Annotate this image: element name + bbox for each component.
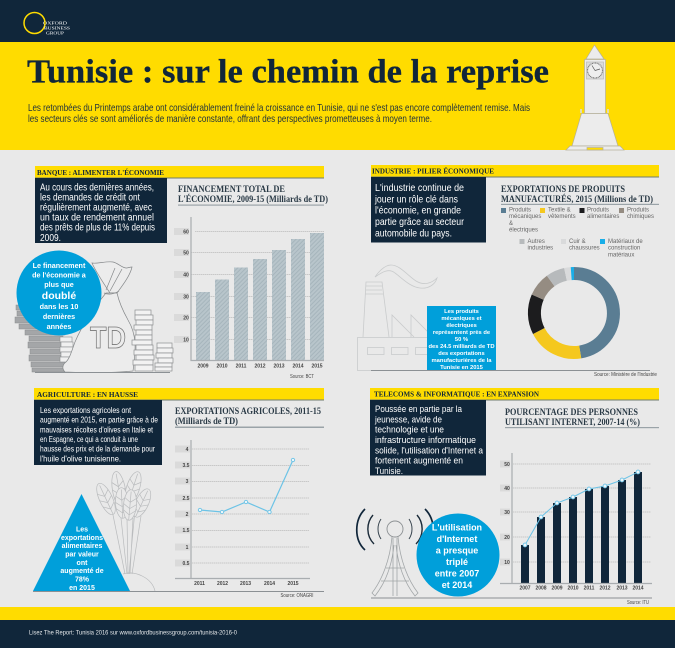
callout: triplé: et 2014 [442, 580, 472, 590]
text block: telecoms: solide, l'utilisation d'Internet a [375, 445, 484, 456]
callout: produits mécaniques: électriques [446, 323, 477, 329]
text block: banque [35, 178, 167, 244]
text block: agriculture: mauvaises récoltes d'olives en Italie et [40, 424, 153, 434]
callout: triplé: L'utilisation [432, 522, 482, 532]
section heading: agriculture: AGRICULTURE : EN HAUSSE [37, 390, 138, 399]
chart title: financement: L'ÉCONOMIE, 2009-15 (Milliards de TD) [178, 194, 328, 204]
text block: banque: des prêts de plus de 11% depuis [40, 222, 155, 234]
callout: doublé: plus que [44, 280, 74, 289]
callout: triplé: a presque [436, 546, 478, 556]
callout: doublé: Le financement [33, 261, 86, 270]
legend: donut: chimiques [627, 214, 654, 220]
line chart: exportations agricoles: 2012 [217, 581, 228, 587]
legend: donut: Cuir & [569, 239, 586, 245]
callout: doublé: dernières [43, 312, 75, 321]
callout: produits mécaniques: des exportations [438, 351, 485, 357]
combo chart: internet: 2010 [567, 586, 579, 592]
line chart: exportations agricoles: 1.5 [183, 528, 190, 534]
legend: donut [501, 208, 654, 258]
combo chart: internet: 40 [504, 486, 510, 492]
line chart: exportations agricoles: 2013 [240, 581, 251, 587]
source: onagri: Source: ONAGRI [280, 593, 314, 599]
combo chart: internet: 30 [504, 510, 510, 516]
line chart: exportations agricoles: 3.5 [183, 463, 190, 469]
callout: triangle 78%: augmenté de [60, 568, 104, 575]
section heading: industrie [371, 165, 659, 178]
callout: triangle 78% [33, 494, 130, 592]
line chart: exportations agricoles: 3 [186, 479, 189, 485]
text block: telecoms: Poussée en partie par la [375, 404, 463, 415]
text block: industrie [371, 177, 486, 242]
source: BCT: Source: BCT [290, 374, 314, 380]
bar chart: financement: 40 [183, 272, 189, 278]
combo chart: internet [500, 453, 652, 592]
callout: triangle 78%: alimentaires [62, 543, 103, 550]
callout: triplé: d'Internet [437, 534, 477, 544]
bar chart: financement: 2009 [197, 364, 209, 370]
intro text: Les retombées du Printemps arabe ont considérablement freiné la croissance en Tunisie, qui ne s'est pas encore complètement remise. Mais [28, 102, 530, 114]
text block: industrie: automobile du pays. [375, 228, 452, 239]
combo chart: internet: 2014 [632, 586, 644, 592]
bar chart: financement: 2015 [311, 364, 323, 370]
bar chart: financement: 20 [183, 316, 189, 322]
line chart: exportations agricoles: 2015 [287, 581, 299, 587]
chart title: internet [505, 407, 659, 428]
combo chart: internet: 2011 [584, 586, 595, 592]
combo chart: internet: 20 [504, 535, 510, 541]
text block: industrie: partie grâce au secteur [375, 217, 464, 228]
legend: donut: matériaux [608, 252, 634, 258]
text block: banque: les demandes de crédit ont [40, 192, 140, 204]
text block: agriculture: Les exportations agricoles ont [40, 405, 131, 415]
bar chart: financement: 30 [183, 294, 189, 300]
legend: donut: industries [528, 246, 553, 252]
legend: donut: Textile & [548, 208, 571, 214]
legend: donut: Matériaux de [608, 239, 643, 245]
callout: produits mécaniques: représentent près de [433, 330, 491, 336]
text block: telecoms: jeunesse, avide de [374, 414, 442, 425]
bar chart: financement: 60 [183, 230, 189, 236]
callout: triplé: entre 2007 [435, 568, 479, 578]
text block: agriculture: hausse des prix et de la demande pour [40, 444, 155, 454]
line chart: exportations agricoles [175, 440, 310, 587]
section heading: telecoms [370, 388, 659, 400]
legend: donut: électriques [509, 228, 538, 234]
icon: clock tower [566, 45, 624, 150]
panel: agriculture [33, 388, 324, 599]
callout: produits mécaniques: 50 % [455, 337, 468, 343]
bar chart: financement: 2013 [273, 364, 285, 370]
text block: banque: un taux de rendement annuel [40, 212, 154, 224]
header bar [0, 0, 675, 42]
legend: donut: construction [608, 246, 640, 252]
text block: telecoms: technologie et une [375, 425, 444, 436]
line chart: exportations agricoles: 1 [186, 545, 189, 551]
chart title: exportations agricoles: (Milliards de TD) [175, 416, 238, 426]
callout: produits mécaniques: manufacturières de la [432, 358, 492, 364]
label: TD on bag: TD [90, 320, 126, 355]
line chart: exportations agricoles: 2 [186, 512, 189, 518]
combo chart: internet: 2009 [551, 586, 563, 592]
source: ITU: Source: ITU [627, 600, 649, 606]
intro text: les secteurs clés se sont améliorés de manière constante, offrant des perspectives prometteuses à moyen terme. [28, 113, 432, 125]
chart title: exportations manufacturées: MANUFACTURÉS, 2015 (Millions de TD) [501, 193, 653, 205]
callout: triangle 78%: par valeur [65, 552, 99, 558]
bar chart: financement: 2010 [216, 364, 228, 370]
chart title: exportations manufacturées [501, 185, 659, 205]
chart title: internet: UTILISANT INTERNET, 2007-14 (%) [505, 417, 640, 427]
callout: doublé: de l'économie a [32, 270, 87, 280]
legend: donut: vêtements [548, 214, 576, 220]
callout: triangle 78%: en 2015 [69, 585, 95, 592]
chart title: internet: POURCENTAGE DES PERSONNES [505, 407, 638, 417]
source: ministère: Source: Ministère de l'Industrie [594, 372, 657, 378]
callout: doublé: dans les 10 [40, 302, 78, 311]
text block: agriculture: l'huile d'olive tunisienne. [40, 453, 121, 463]
callout: produits mécaniques: Les produits [444, 309, 479, 315]
footer link text: Lisez The Report: Tunisia 2016 sur www.oxfordbusinessgroup.com/tunisia-2016-0 [29, 630, 237, 636]
text block: telecoms [370, 400, 486, 477]
chart title: exportations manufacturées: EXPORTATIONS DE PRODUITS [501, 185, 625, 195]
text block: telecoms: fortement augmenté en [375, 456, 463, 467]
text block: telecoms: infrastructure informatique [375, 435, 476, 446]
donut chart [534, 274, 613, 352]
legend: donut: & [509, 221, 513, 227]
combo chart: internet: 2013 [616, 586, 628, 592]
logo: Oxford Business Group: GROUP [46, 30, 65, 36]
callout: triplé [416, 514, 500, 596]
footer [0, 607, 675, 648]
callout: doublé: doublé [42, 290, 76, 302]
text block: banque: 2009. [40, 233, 61, 244]
text block: telecoms: Tunisie. [375, 466, 403, 477]
logo: Oxford Business Group: OXFORD [43, 20, 68, 26]
panel: banque [15, 166, 328, 380]
callout: triangle 78%: exportations [61, 535, 103, 542]
callout: triplé: triplé [446, 557, 468, 567]
legend: donut: chaussures [569, 246, 600, 252]
legend: donut: Produits [627, 208, 649, 214]
text block: banque: Au cours des dernières années, [40, 182, 154, 194]
combo chart: internet: 2008 [535, 586, 547, 592]
chart title: exportations agricoles [175, 406, 324, 428]
icon: antenna tower [357, 509, 433, 596]
legend: donut: mécaniques [509, 214, 541, 220]
line chart: exportations agricoles: 4 [186, 447, 189, 453]
bar chart: financement: 50 [183, 250, 189, 256]
line chart: exportations agricoles: 2011 [194, 581, 205, 587]
callout: triangle 78%: ont [77, 560, 88, 567]
line chart: exportations agricoles: 0.5 [183, 561, 190, 567]
line chart: exportations agricoles: 2.5 [183, 496, 190, 502]
text block: industrie: L'industrie continue de [375, 183, 464, 194]
section heading: banque: BANQUE : ALIMENTER L'ÉCONOMIE [37, 167, 164, 177]
legend: donut: Produits [587, 208, 609, 214]
bar chart: financement: 2011 [236, 364, 247, 370]
combo chart: internet: 2007 [519, 586, 531, 592]
combo chart: internet: 10 [504, 560, 510, 566]
panel: industrie [358, 165, 659, 378]
yellow title band [0, 42, 675, 150]
section heading: industrie: INDUSTRIE : PILIER ÉCONOMIQUE [372, 166, 494, 176]
callout: triangle 78%: 78% [75, 576, 90, 584]
bar chart: financement: 2012 [254, 364, 266, 370]
intro text [28, 102, 530, 125]
legend: donut: Autres [528, 239, 545, 245]
logo: Oxford Business Group [24, 12, 71, 36]
chart title: financement [178, 184, 328, 206]
panel: telecoms [357, 388, 659, 606]
callout: produits mécaniques: des 24.5 milliards de TD [428, 344, 495, 350]
text block: industrie: l'économie, en grande [375, 206, 461, 217]
chart title: exportations agricoles: EXPORTATIONS AGRICOLES, 2011-15 [175, 406, 321, 416]
callout: produits mécaniques: mécaniques et [441, 316, 482, 322]
section heading: agriculture [34, 388, 324, 400]
bar chart: financement: 2014 [292, 364, 304, 370]
text block: agriculture: augmenté en 2015, en partie grâce à de [40, 415, 158, 425]
combo chart: internet: 2012 [599, 586, 611, 592]
legend: donut: alimentaires [587, 214, 619, 220]
callout: triangle 78%: Les [76, 526, 88, 534]
logo: Oxford Business Group: BUSINESS [44, 26, 71, 30]
section heading: banque [35, 166, 324, 178]
text block: agriculture [34, 400, 162, 465]
chart title: financement: FINANCEMENT TOTAL DE [178, 184, 285, 194]
callout: doublé [16, 250, 102, 336]
line chart: exportations agricoles: 2014 [264, 581, 275, 587]
section heading: telecoms: TELECOMS & INFORMATIQUE : EN EXPANSION [374, 390, 539, 398]
callout: doublé: années [47, 322, 71, 331]
text block: industrie: jouer un rôle clé dans [374, 194, 458, 205]
text block: agriculture: en Espagne, ce qui a conduit à une [40, 434, 138, 444]
icon: wheat [93, 470, 155, 591]
callout: produits mécaniques: Tunisie en 2015 [440, 365, 484, 371]
text block: banque: régulièrement augmenté, avec [40, 202, 152, 214]
bar chart: financement [174, 217, 324, 370]
title: Tunisie : sur le chemin de la reprise [27, 54, 549, 90]
bar chart: financement: 10 [183, 338, 189, 344]
icon: money bag and coins [15, 262, 173, 373]
icon: factory [358, 265, 437, 370]
callout: produits mécaniques [427, 306, 496, 371]
legend: donut: Produits [509, 208, 531, 214]
combo chart: internet: 50 [504, 462, 510, 468]
